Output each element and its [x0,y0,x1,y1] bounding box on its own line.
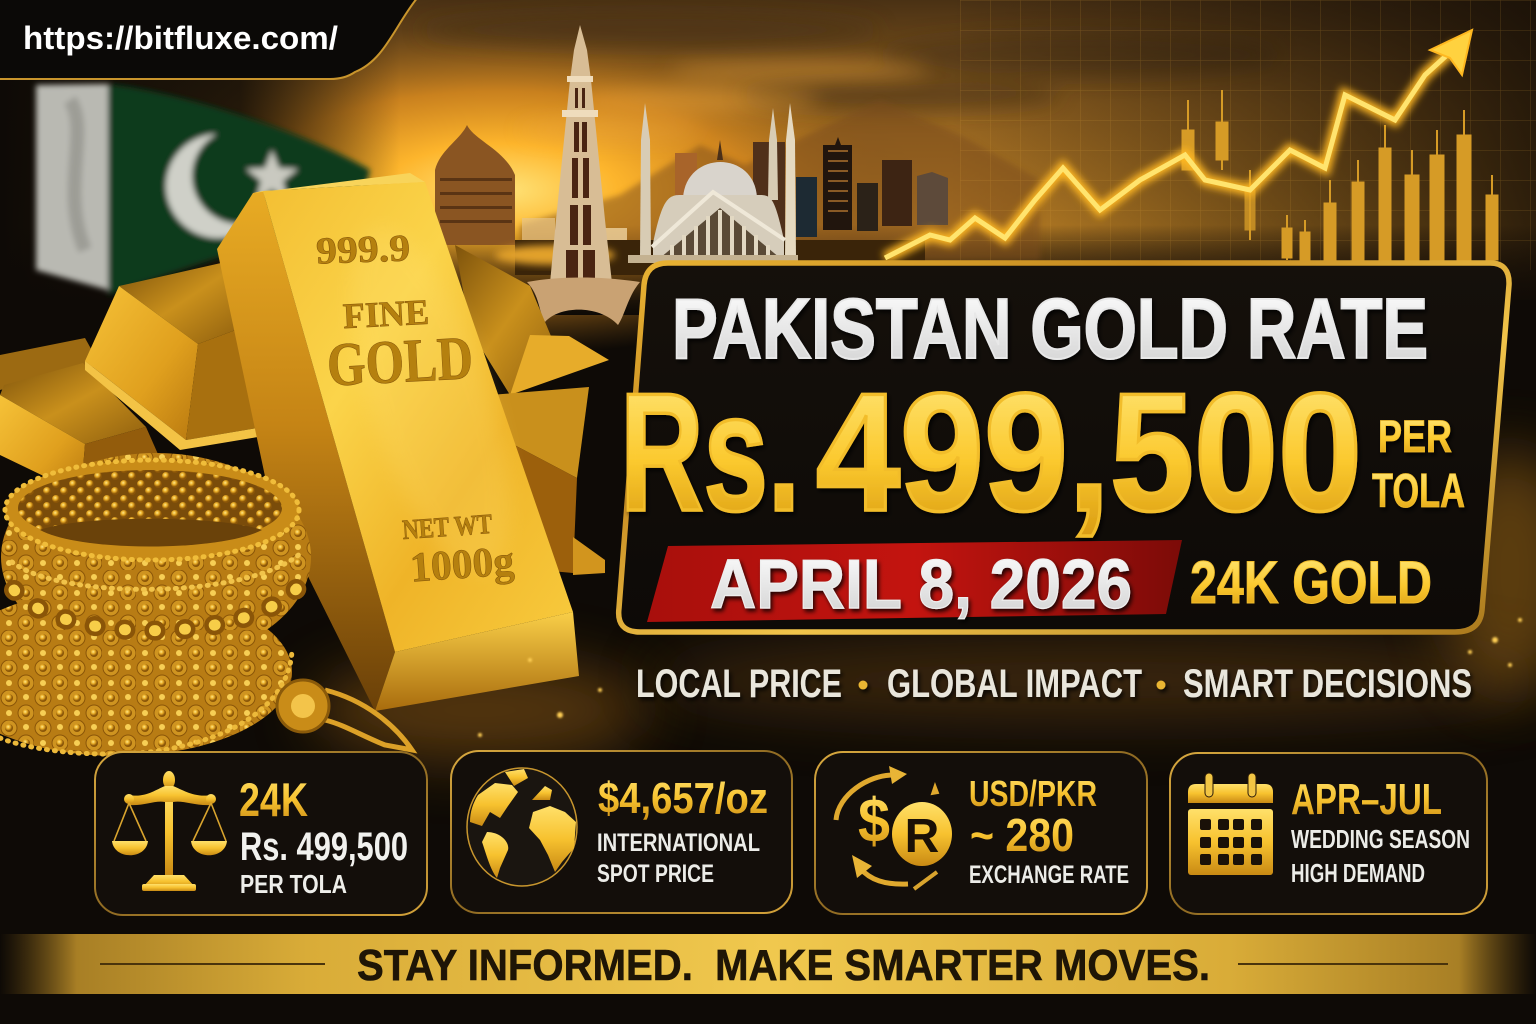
main price: Rs. [620,358,800,546]
tagline [636,662,1472,706]
card text: ~ 280 [970,809,1074,861]
bar engraving: 999.9 [315,227,411,273]
card text: USD/PKR [969,773,1097,814]
card: international spot [451,751,792,913]
bar engraving: 1000g [409,538,516,592]
card: 24K rate [95,752,427,915]
skyline with minar-e-pakistan and faisal mosque [435,25,1040,325]
bar engraving [315,227,516,592]
distant hills [520,100,1040,260]
gold ring [277,680,412,750]
icon: currency exchange [836,766,952,889]
card text [969,773,1129,889]
card: wedding season [1170,753,1487,914]
rising line [885,45,1458,258]
website url tab: https://bitfluxe.com/ [23,20,338,56]
chart grid [960,0,1536,270]
card text: Rs. 499,500 [240,825,408,869]
icon: currency exchange: $ [858,787,890,856]
card text [597,774,768,888]
card text: $4,657/oz [598,774,768,823]
card text: 24K [239,773,308,826]
faisal mosque [628,103,798,263]
card text: APR–JUL [1291,775,1442,824]
per tola unit: PER [1378,411,1452,462]
per tola unit [1372,411,1465,518]
date text: APRIL 8, 2026 [710,545,1132,623]
panel frame [619,263,1509,632]
card text [239,773,408,899]
stock chart [885,0,1536,270]
arrow head [1430,30,1472,75]
date banner [647,540,1182,622]
rising line glow [885,45,1458,258]
icon: currency exchange: R [905,810,939,863]
card text [1291,775,1470,888]
lower bangle [0,588,292,756]
upper bangle [1,453,311,661]
icon: balance scale [112,771,227,891]
card: exchange rate [815,752,1147,914]
candlesticks [1182,90,1498,260]
card text: WEDDING SEASON [1291,824,1470,854]
card text: EXCHANGE RATE [969,861,1129,889]
main price panel [619,263,1509,632]
hotel tower [435,125,515,245]
footer banner [0,934,1536,994]
minar-e-pakistan tower [527,25,640,325]
card text: INTERNATIONAL [597,829,760,857]
pakistan flag [36,84,370,295]
bar engraving: NET WT [401,509,493,546]
bar engraving: FINE [342,292,430,336]
middle gold bar [85,263,275,450]
tagline: GLOBAL IMPACT [887,662,1142,706]
bar engraving: GOLD [325,324,475,400]
card text: SPOT PRICE [597,860,714,888]
card text: PER TOLA [240,869,347,899]
purity label: 24K GOLD [1190,549,1432,616]
gold bars and jewellery [0,173,609,756]
icon: globe [467,768,577,886]
card text: HIGH DEMAND [1291,858,1425,888]
tagline: LOCAL PRICE [636,662,842,706]
city buildings [522,137,948,246]
sparks [478,618,1522,737]
footer banner: STAY INFORMED. MAKE SMARTER MOVES. [357,941,1210,990]
main price [620,358,1362,546]
icon: calendar [1188,773,1273,875]
large gold bar [217,173,579,711]
back gold bars [0,245,609,575]
website url tab [0,0,418,79]
main price: 499,500 [816,358,1362,546]
ground haze [515,240,925,275]
per tola unit: TOLA [1372,465,1465,518]
